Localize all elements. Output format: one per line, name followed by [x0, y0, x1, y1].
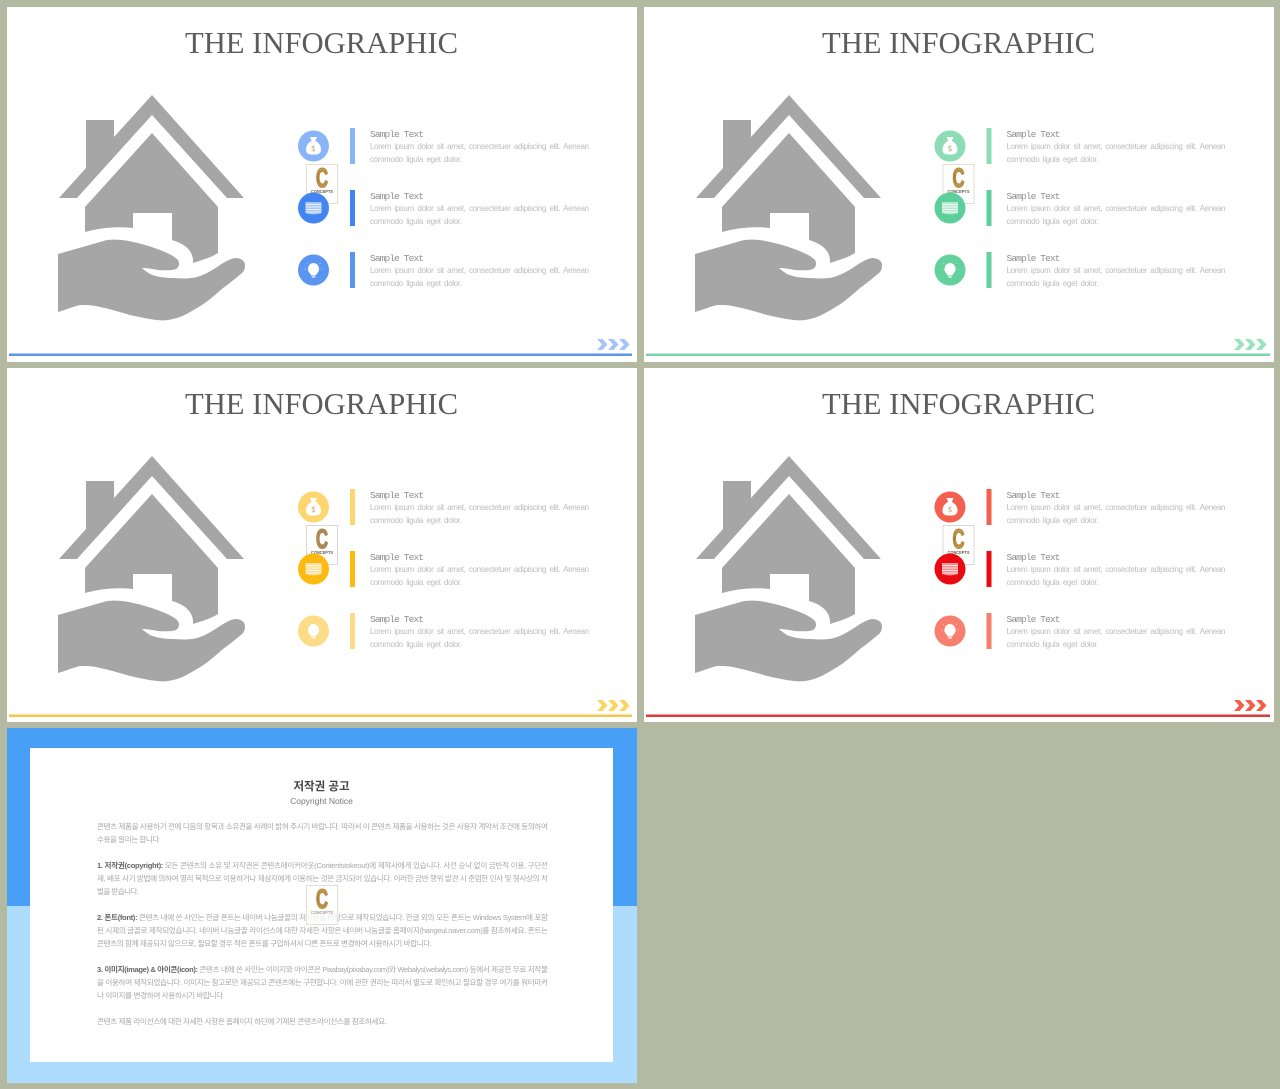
item 1: Sample Text — [1006, 129, 1060, 140]
item 1 — [298, 489, 589, 525]
logo watermark — [306, 163, 338, 204]
item 3: commodo ligula eget dolor. — [1006, 640, 1098, 649]
section 3: image and icon: 나 이미지를 변경하여 사용하시기 바랍니다. — [97, 990, 225, 1000]
heading: 저작권 공고 — [293, 779, 350, 793]
section 3: image and icon — [97, 964, 548, 1000]
arrows — [1234, 339, 1266, 350]
panel: blue infographic slide — [7, 7, 637, 362]
panel: red infographic slide — [644, 368, 1274, 722]
item 3: Sample Text — [370, 253, 424, 264]
item 1 — [934, 128, 1226, 164]
item 3 — [298, 252, 589, 288]
logo watermark: CONCEPTS — [311, 189, 334, 195]
icon: house in hand — [695, 456, 882, 681]
item 1: Lorem ipsum dolor sit amet, consectetuer adipiscing elit. Aenean — [1006, 503, 1226, 512]
item 3: Sample Text — [370, 614, 424, 625]
item 2: Lorem ipsum dolor sit amet, consectetuer adipiscing elit. Aenean — [1006, 204, 1226, 213]
item 3: commodo ligula eget dolor. — [1006, 279, 1098, 288]
logo watermark: C — [952, 524, 964, 554]
intro text: 콘텐츠 제품을 사용하기 전에 다음의 항목과 소유권을 사례이 밝혀 주시기 바랍니다. 따라서 이 콘텐츠 제품을 사용하는 것은 사용자 계약서 조건에 동의하여 — [97, 821, 548, 831]
intro text — [97, 821, 548, 844]
icon: house in hand — [695, 95, 882, 320]
item 1: commodo ligula eget dolor. — [370, 155, 462, 164]
item 3 — [934, 613, 1226, 649]
subheading: Copyright Notice — [290, 796, 353, 806]
item 2: commodo ligula eget dolor. — [1006, 217, 1098, 226]
item 2: Lorem ipsum dolor sit amet, consectetuer adipiscing elit. Aenean — [370, 204, 589, 213]
item 1: commodo ligula eget dolor. — [370, 516, 462, 525]
item 2: Sample Text — [1006, 552, 1060, 563]
section 2: font: 2. 폰트(font): 콘텐츠 내에 쓴 사인는 한글 폰트는 네이버 나눔글꼴의 저작권을 바탕으로 제작되었습니다. 한글 외의 모든 폰트는 Windows System에 포함 — [97, 912, 548, 922]
item 2 — [298, 190, 589, 226]
logo watermark: C — [316, 163, 328, 193]
panel: copyright notice — [7, 728, 637, 1083]
logo watermark: CONCEPTS — [311, 550, 334, 556]
arrows — [1234, 700, 1266, 711]
item 1: commodo ligula eget dolor. — [1006, 516, 1098, 525]
section 3: image and icon: 3. 이미지(image) & 아이콘(icon): 콘텐츠 내에 쓴 사인는 이미지와 아이콘은 Pixabay(pixabay.com)와 Webalys(webalys.com) 등에서 제공한 무료 저작물 — [97, 964, 548, 974]
title: THE INFOGRAPHIC — [822, 386, 1095, 421]
item 2 — [934, 551, 1226, 587]
logo watermark: C — [316, 884, 328, 914]
item 1: Lorem ipsum dolor sit amet, consectetuer adipiscing elit. Aenean — [370, 142, 589, 151]
item 3: Sample Text — [1006, 253, 1060, 264]
arrows — [597, 339, 630, 350]
section 3: image and icon: 을 이용하여 제작되었습니다. 이미지는 참고로만 제공되고 콘텐츠에는 구현합니다. 이에 관한 권리는 따라서 별도로 확인하고 필요할 경우 여기를 워터마커 — [97, 977, 548, 987]
item 1: Sample Text — [1006, 490, 1060, 501]
logo watermark: C — [952, 163, 964, 193]
logo watermark — [306, 884, 338, 924]
logo watermark: CONCEPTS — [948, 189, 970, 195]
item 3 — [934, 252, 1226, 288]
item 1: Sample Text — [370, 129, 424, 140]
section 2: font — [97, 912, 548, 948]
item 2 — [934, 190, 1226, 226]
item 1: Lorem ipsum dolor sit amet, consectetuer adipiscing elit. Aenean — [370, 503, 589, 512]
section 1: copyright: 1. 저작권(copyright): 모든 콘텐츠의 소유 및 저작권은 콘텐츠메이커아웃(Contentstokeout)에 제작사에게 있습니다. 사전 승낙 없이 금반적 이용, 구단전 — [97, 860, 548, 870]
item 3: Lorem ipsum dolor sit amet, consectetuer adipiscing elit. Aenean — [370, 266, 589, 275]
item 2: Sample Text — [370, 191, 424, 202]
arrows — [597, 700, 630, 711]
item 2: Sample Text — [370, 552, 424, 563]
logo watermark: CONCEPTS — [948, 550, 970, 556]
item 3: commodo ligula eget dolor. — [370, 279, 462, 288]
section 1: copyright: 벌을 받습니다. — [97, 886, 139, 896]
item 2: commodo ligula eget dolor. — [370, 217, 462, 226]
item 1: Sample Text — [370, 490, 424, 501]
item 2: commodo ligula eget dolor. — [1006, 578, 1098, 587]
intro text: 수용을 알리는 합니다. — [97, 834, 161, 844]
item 1 — [934, 489, 1226, 525]
logo watermark: CONCEPTS — [311, 910, 334, 916]
item 2: Lorem ipsum dolor sit amet, consectetuer adipiscing elit. Aenean — [1006, 565, 1226, 574]
title: THE INFOGRAPHIC — [822, 25, 1095, 60]
item 2: Lorem ipsum dolor sit amet, consectetuer adipiscing elit. Aenean — [370, 565, 589, 574]
item 2 — [298, 551, 589, 587]
section 1: copyright: 재, 배포 사기 방법에 의하여 영리 목적으로 이용하거나 제삼자에게 이용하는 것은 금지되어 있습니다. 이러한 금반 행위 발견 시 준엄한 민사 및 형사상의 처 — [97, 873, 548, 883]
license note: 콘텐츠 제품 라이선스에 대한 자세한 사항은 홈페이지 하단에 기재된 콘텐츠라이선스를 참조하세요. — [97, 1016, 387, 1026]
logo watermark: C — [316, 524, 328, 554]
item 3: Sample Text — [1006, 614, 1060, 625]
item 3 — [298, 613, 589, 649]
item 2: Sample Text — [1006, 191, 1060, 202]
panel: yellow infographic slide — [7, 368, 637, 722]
icon: house in hand — [58, 95, 245, 320]
icon: house in hand — [58, 456, 245, 681]
section 2: font: 된 시제의 글꼴로 제작되었습니다. 네이버 나눔글꼴 라이선스에 대한 자세한 사항은 네이버 나눔글꼴 홈페이지(hangeul.naver.com)를 참조하세요. 폰트는 — [97, 925, 548, 935]
item 1: commodo ligula eget dolor. — [1006, 155, 1098, 164]
item 3: Lorem ipsum dolor sit amet, consectetuer adipiscing elit. Aenean — [1006, 627, 1226, 636]
item 3: Lorem ipsum dolor sit amet, consectetuer adipiscing elit. Aenean — [1006, 266, 1226, 275]
title: THE INFOGRAPHIC — [185, 386, 458, 421]
panel: green infographic slide — [644, 7, 1274, 362]
item 2: commodo ligula eget dolor. — [370, 578, 462, 587]
item 1: Lorem ipsum dolor sit amet, consectetuer adipiscing elit. Aenean — [1006, 142, 1226, 151]
item 3: Lorem ipsum dolor sit amet, consectetuer adipiscing elit. Aenean — [370, 627, 589, 636]
section 1: copyright — [97, 860, 548, 896]
logo watermark — [943, 524, 974, 564]
logo watermark — [943, 163, 974, 204]
section 2: font: 콘텐츠의 함께 제공되지 않으므로, 필요할 경우 적은 폰트를 구입하셔서 다른 폰트로 변경하여 사용하시기 바랍니다. — [97, 938, 432, 948]
item 3: commodo ligula eget dolor. — [370, 640, 462, 649]
title: THE INFOGRAPHIC — [185, 25, 458, 60]
item 1 — [298, 128, 589, 164]
logo watermark — [306, 524, 338, 564]
